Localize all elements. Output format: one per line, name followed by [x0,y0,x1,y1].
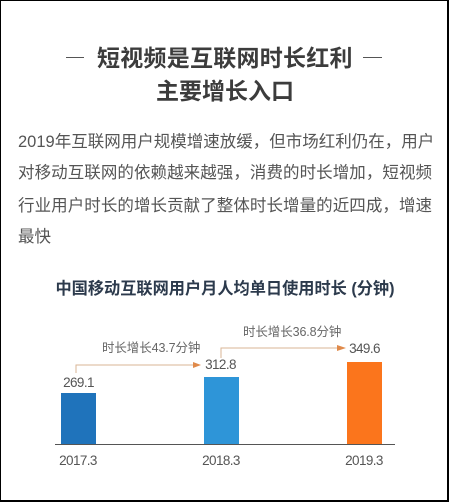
chart title: 中国移动互联网用户月人均单日使用时长 (分钟) [55,280,395,298]
body text: 2019年互联网用户规模增速放缓，但市场红利仍在，用户 [18,133,434,151]
body text: 行业用户时长的增长贡献了整体时长增量的近四成，增速 [18,197,432,215]
title [66,45,382,104]
label 2019.3: 2019.3 [345,453,383,468]
bar chart [55,325,395,468]
bar 2018.3 [204,377,239,444]
bar 2017.3 [61,393,96,444]
bar 2019.3 [347,362,382,444]
title line 2: 主要增长入口 [156,78,294,104]
body text: 最快 [18,228,51,246]
body text: 对移动互联网的依赖越来越强，消费的时长增加，短视频 [18,164,432,182]
value 269.1: 269.1 [63,375,94,390]
title dash left [66,57,84,58]
title line 1: 短视频是互联网时长红利 [97,45,353,71]
growth label 43.7: 时长增长43.7分钟 [102,341,200,355]
label 2017.3: 2017.3 [59,453,97,468]
body text [18,132,434,246]
label 2018.3: 2018.3 [202,453,240,468]
growth label 36.8: 时长增长36.8分钟 [243,325,341,339]
axis line [55,444,395,445]
value 312.8: 312.8 [205,357,236,372]
growth arrows [76,345,346,373]
value 349.6: 349.6 [349,341,380,356]
title dash right [363,57,382,58]
